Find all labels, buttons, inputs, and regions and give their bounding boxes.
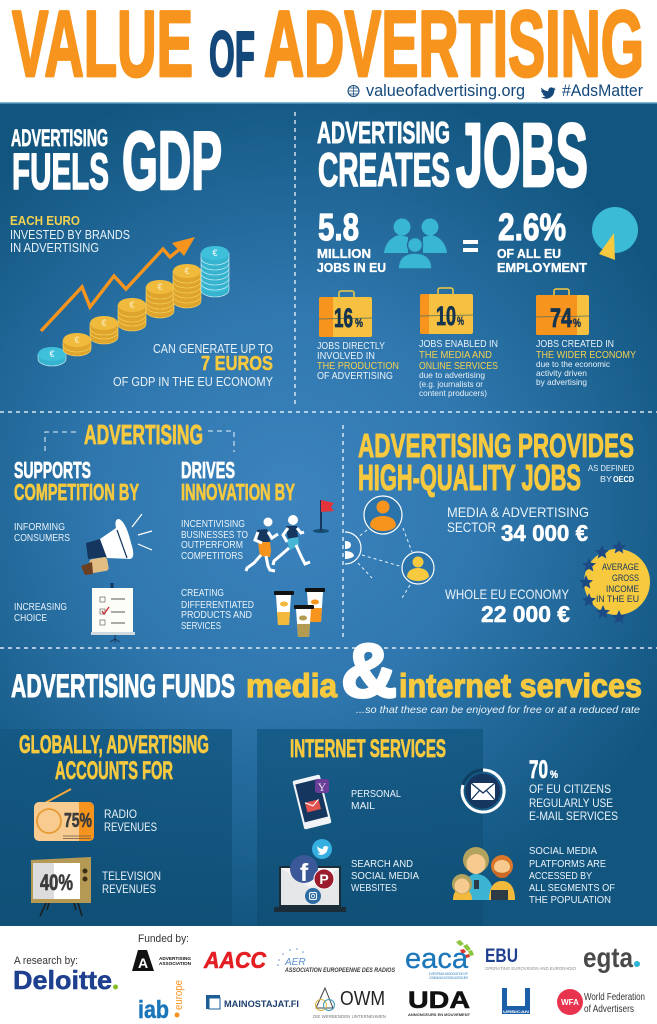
logo: EACA: COMMUNICATIONS AGENCIES — [429, 976, 468, 980]
icon: family with devices — [452, 847, 515, 900]
text: 70 percent email: REGULARLY USE — [529, 796, 613, 810]
heading: globally advertising accounts for: ACCOUNTS FOR — [55, 757, 173, 785]
panel: internet services — [257, 729, 483, 926]
logo: iab europe — [138, 980, 185, 1024]
stat: 2.6 percent — [497, 207, 587, 275]
text: increasing choice: INCREASING — [14, 601, 67, 613]
briefcase: 10 percent: 10 — [436, 301, 456, 331]
text: social media platforms — [529, 845, 615, 906]
logo: Advertising Association — [132, 950, 192, 971]
logo: EBU: OPERATING EUROVISION AND EURORADIO — [485, 966, 576, 971]
stat: whole EU income: 22 000 € — [481, 601, 570, 627]
logo: World Federation of Advertisers: of Advertisers — [584, 1004, 634, 1015]
heading: fuels GDP: FUELS — [12, 143, 109, 200]
stat: 5.8 million jobs: MILLION — [317, 246, 371, 261]
stat: 2.6 percent: EMPLOYMENT — [497, 260, 587, 275]
briefcase: 10 percent: % — [457, 314, 464, 328]
text: radio revenues: REVENUES — [104, 822, 157, 834]
arrow: growth — [41, 237, 195, 331]
research credit: Deloitte: Deloitte — [13, 965, 112, 995]
dashed dividers — [295, 112, 343, 640]
text: direct jobs: THE PRODUCTION — [317, 360, 399, 372]
briefcase: 74 percent: % — [573, 316, 581, 330]
website and hashtag: valueofadvertising.org — [366, 82, 525, 100]
footer: logos — [0, 926, 657, 1024]
text: can generate up to 7 euros: CAN GENERATE UP TO — [153, 342, 273, 356]
text: direct jobs: INVOLVED IN — [317, 350, 375, 362]
logo: egta: egta — [583, 942, 633, 973]
heading: high-quality jobs — [358, 428, 634, 498]
icon: rising coin stacks: € — [49, 349, 55, 359]
logo: OWM — [313, 988, 386, 1019]
panel: globally — [0, 729, 232, 926]
text: wider economy jobs: due to the economic — [536, 359, 611, 369]
heading: drives innovation: INNOVATION BY — [181, 479, 295, 505]
logo: UBA: URBICAN — [503, 1010, 530, 1014]
text: informing consumers: INFORMING — [14, 521, 65, 533]
text: direct jobs: JOBS DIRECTLY — [317, 340, 385, 352]
text: enabled jobs: ONLINE SERVICES — [419, 360, 498, 372]
heading: fuels GDP: ADVERTISING — [11, 125, 108, 152]
equals sign — [463, 240, 478, 252]
panel: high-quality jobs — [345, 428, 650, 627]
logo: EBU: EBU — [485, 946, 518, 967]
logo: AER: ASSOCIATION EUROPEENNE DES RADIOS — [284, 968, 395, 974]
logo: World Federation of Advertisers: WFA — [561, 998, 579, 1007]
text: personal mail: MAIL — [351, 800, 375, 812]
text: search and social media: WEBSITES — [351, 882, 397, 894]
icon: coffee cups — [274, 588, 325, 637]
diagram: connected people — [345, 496, 434, 598]
briefcase: 74 percent — [536, 289, 589, 335]
text: enabled jobs: (e.g. journalists or — [419, 379, 483, 389]
text: as defined by OECD: BY — [600, 474, 612, 484]
text: direct jobs — [317, 340, 399, 382]
badge: average gross income: IN THE EU — [596, 594, 639, 605]
badge: average gross income: INCOME — [606, 584, 639, 595]
logo: Mainostajat: MAINOSTAJAT.FI — [224, 999, 299, 1010]
text: informing consumers: CONSUMERS — [14, 532, 70, 544]
text: differentiated products: PRODUCTS AND — [181, 609, 252, 621]
briefcase: 16 percent: 16 — [334, 303, 353, 333]
text: 70 percent email: OF EU CITIZENS — [529, 782, 611, 796]
text: differentiated products: CREATING — [181, 587, 224, 599]
panel: advertising creates jobs — [317, 106, 638, 398]
logo: World Federation of Advertisers — [557, 989, 645, 1015]
pie chart: share of employment — [592, 207, 638, 260]
banner: advertising funds media and internet services — [11, 629, 642, 716]
icon: email ring 70 percent — [462, 770, 504, 812]
text: can generate up to 7 euros: 7 EUROS — [201, 353, 273, 375]
stat: 5.8 million jobs: 5.8 — [318, 207, 359, 249]
text: as defined by OECD: AS DEFINED — [588, 463, 634, 473]
banner: advertising funds media and internet services: ...so that these can be enjoyed for free or at a reduced rate — [356, 704, 640, 716]
research credit: Deloitte: A research by: — [14, 955, 78, 967]
stat: 5.8 million jobs — [317, 207, 386, 275]
text: enabled jobs: due to advertising — [419, 370, 485, 380]
text: incentivising businesses: COMPETITORS — [181, 550, 243, 562]
icon: runners and flag — [246, 500, 334, 571]
text: each euro: INVESTED BY BRANDS — [10, 228, 130, 242]
panel: competition and innovation — [14, 419, 334, 643]
text: enabled jobs: JOBS ENABLED IN — [419, 338, 498, 350]
text: social media platforms: SOCIAL MEDIA — [529, 845, 597, 857]
heading: supports competition: COMPETITION BY — [14, 479, 139, 505]
text: search and social media: SOCIAL MEDIA — [351, 870, 419, 882]
logo: OWM: DIE WERBENDEN UNTERNEHMEN — [313, 1014, 386, 1019]
text: 70 percent email: 70 — [529, 756, 548, 784]
logo: Advertising Association: ADVERTISING — [159, 956, 192, 961]
panel: advertising fuels GDP — [10, 114, 274, 389]
stat: media and advertising income: SECTOR — [447, 519, 496, 535]
icon: rising coin stacks: € — [129, 300, 135, 310]
icon: phone with mail — [292, 774, 332, 830]
text: 70 percent email: E-MAIL SERVICES — [529, 809, 618, 823]
heading: creates jobs — [317, 106, 588, 206]
logo: iab europe: europe — [173, 980, 185, 1010]
logo: AER: AER — [284, 957, 306, 968]
text: differentiated products — [181, 587, 254, 632]
text: radio revenues: RADIO — [104, 809, 137, 821]
heading: creates jobs: ADVERTISING — [317, 115, 450, 150]
heading: fuels GDP — [11, 114, 222, 207]
icon: radio 75 percent — [34, 789, 94, 841]
icon: rising coin stacks: € — [101, 318, 107, 328]
briefcase: 16 percent — [319, 291, 372, 337]
text: social media platforms: THE POPULATION — [529, 894, 611, 906]
icon: rising coin stacks: € — [184, 266, 190, 276]
banner: advertising funds media and internet services: internet services — [399, 667, 642, 704]
logo: Mainostajat — [206, 995, 299, 1010]
heading: advertising with bracket: ADVERTISING — [84, 419, 203, 450]
stat: whole EU income — [445, 586, 570, 627]
badge: average gross income: GROSS — [612, 573, 639, 584]
text: 70 percent email: % — [550, 769, 558, 781]
text: wider economy jobs: JOBS CREATED IN — [536, 338, 614, 350]
icon: flipchart checklist — [91, 583, 135, 643]
text: differentiated products: SERVICES — [181, 620, 221, 632]
logo: AACC: AACC — [203, 947, 266, 973]
text: wider economy jobs: activity driven — [536, 368, 587, 378]
text: search and social media — [351, 858, 419, 894]
stat: whole EU income: WHOLE EU ECONOMY — [445, 586, 570, 602]
logo: UBA — [502, 988, 530, 1014]
text: each euro — [10, 214, 130, 255]
heading: globally advertising accounts for — [19, 731, 209, 785]
logo: EBU — [485, 946, 576, 971]
icon: television 40 percent: 40% — [40, 870, 73, 895]
text: search and social media: SEARCH AND — [351, 858, 413, 870]
stat: 2.6 percent: OF ALL EU — [497, 246, 561, 261]
text: television revenues: TELEVISION — [102, 871, 161, 883]
text: each euro: EACH EURO — [10, 214, 80, 228]
website and hashtag: #AdsMatter — [562, 82, 643, 100]
stat: 5.8 million jobs: JOBS IN EU — [317, 260, 386, 275]
heading: globally advertising accounts for: GLOBALLY, ADVERTISING — [19, 731, 209, 759]
text: personal mail — [351, 788, 401, 812]
text: can generate up to 7 euros — [113, 342, 274, 389]
stat: media and advertising income: 34 000 € — [501, 520, 588, 546]
heading: supports competition: SUPPORTS — [14, 457, 91, 483]
banner: advertising funds media and internet services: media — [246, 667, 338, 704]
icon: phone with mail: Y — [318, 780, 327, 794]
header: white title band — [0, 0, 657, 102]
text: enabled jobs: THE MEDIA AND — [419, 349, 492, 361]
icon: rising coin stacks — [38, 246, 229, 366]
text: as defined by OECD: OECD — [613, 474, 634, 484]
text: increasing choice: CHOICE — [14, 612, 47, 624]
logo: Advertising Association: ASSOCIATION — [159, 961, 191, 966]
text: enabled jobs — [419, 338, 498, 398]
text: incentivising businesses: OUTPERFORM — [181, 539, 243, 551]
badge: average gross income: AVERAGE — [602, 562, 639, 573]
text: wider economy jobs: by advertising — [536, 377, 587, 387]
text: television revenues — [102, 871, 161, 896]
title — [12, 0, 644, 96]
heading: creates jobs: CREATES — [318, 143, 450, 196]
text: informing consumers — [14, 521, 70, 544]
text: each euro: IN ADVERTISING — [10, 241, 99, 255]
funded by label: Funded by: — [138, 933, 189, 945]
logo: OWM: OWM — [340, 988, 385, 1010]
logo: Advertising Association: A — [138, 955, 148, 971]
stat: 2.6 percent: 2.6% — [498, 207, 566, 249]
icon: television 40 percent — [31, 857, 91, 916]
text: direct jobs: OF ADVERTISING — [317, 370, 393, 382]
text: differentiated products: DIFFERENTIATED — [181, 599, 254, 611]
banner: advertising funds media and internet services: & — [341, 629, 397, 714]
text: as defined by OECD — [588, 463, 634, 484]
text: increasing choice — [14, 601, 67, 624]
logo: EACA: eaca — [405, 943, 469, 975]
heading: fuels GDP: GDP — [122, 114, 222, 207]
logo: UDA: UDA — [408, 987, 470, 1014]
text: social media platforms: ALL SEGMENTS OF — [529, 882, 615, 894]
icon: megaphone — [81, 514, 152, 575]
icon: people — [384, 218, 447, 269]
icon: laptop with social media — [274, 839, 346, 912]
banner: advertising funds media and internet services: ADVERTISING FUNDS — [11, 668, 235, 704]
logo: UDA: ANNONCEURS EN MOUVEMENT — [408, 1013, 471, 1017]
text: personal mail: PERSONAL — [351, 788, 401, 800]
icon: laptop with social media: P — [319, 871, 329, 887]
briefcase: 10 percent — [420, 288, 473, 334]
text: can generate up to 7 euros: OF GDP IN THE EU ECONOMY — [113, 375, 274, 389]
heading: supports competition — [14, 457, 139, 505]
heading: drives innovation — [181, 457, 295, 505]
text: television revenues: REVENUES — [102, 884, 156, 896]
text: incentivising businesses — [181, 518, 248, 562]
icon: rising coin stacks: € — [212, 248, 218, 258]
text: radio revenues — [104, 809, 157, 834]
logo: AER — [278, 949, 395, 974]
stat: media and advertising income — [447, 504, 589, 546]
logo: EACA: EUROPEAN ASSOCIATION OF — [429, 972, 468, 976]
text: enabled jobs: content producers) — [419, 388, 487, 398]
badge: average gross income — [579, 540, 650, 624]
icon: laptop with social media: f — [300, 859, 309, 887]
briefcase: 16 percent: % — [355, 316, 363, 330]
icon: rising coin stacks: € — [157, 282, 163, 292]
stat: media and advertising income: MEDIA & ADVERTISING — [447, 504, 589, 520]
icon: rising coin stacks: € — [74, 335, 80, 345]
title: OF — [209, 18, 255, 90]
briefcase: 74 percent: 74 — [550, 303, 572, 333]
text: wider economy jobs — [536, 338, 636, 387]
website and hashtag — [348, 82, 643, 100]
text: 70 percent email — [529, 756, 618, 823]
text: social media platforms: ACCESSED BY — [529, 870, 592, 882]
heading: internet services: INTERNET SERVICES — [290, 735, 446, 763]
logo: iab europe: iab — [138, 996, 169, 1024]
text: wider economy jobs: THE WIDER ECONOMY — [536, 349, 636, 361]
text: incentivising businesses: BUSINESSES TO — [181, 529, 248, 541]
research credit: Deloitte — [13, 955, 118, 995]
icon: radio 75 percent: 75% — [64, 810, 92, 832]
text: incentivising businesses: INCENTIVISING — [181, 518, 245, 530]
heading: advertising with bracket — [45, 419, 234, 452]
text: social media platforms: PLATFORMS ARE — [529, 858, 606, 870]
heading: drives innovation: DRIVES — [181, 457, 235, 483]
